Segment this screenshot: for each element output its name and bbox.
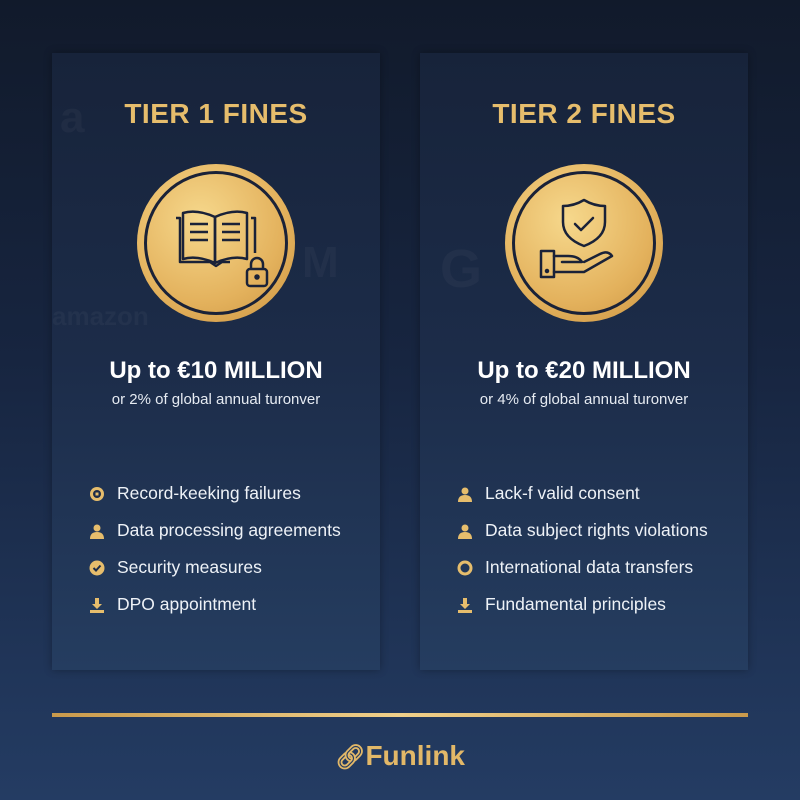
tier 2 list: Fundamental principles [485, 594, 666, 614]
tier 1 list: Security measures [117, 557, 262, 577]
tier 2 subtext: or 4% of global annual turonver [480, 391, 688, 408]
gold divider [52, 713, 748, 717]
tier 2 list: International data transfers [485, 557, 693, 577]
tier 1 title: TIER 1 FINES [124, 98, 308, 129]
tier 1 list: Record-keeking failures [117, 483, 301, 503]
tier 2 list [458, 483, 708, 614]
tier 1 subtext: or 2% of global annual turonver [112, 391, 320, 408]
tier 1 list: Data processing agreements [117, 520, 341, 540]
logo: Funlink: 🔗︎Funlink [335, 740, 465, 771]
panel: tier 2 [420, 53, 748, 670]
icon: book with lock [137, 164, 295, 322]
panel: tier 1: amazon [52, 301, 149, 331]
panel: tier 1: a [60, 93, 84, 142]
panel: tier 1: M [302, 238, 339, 287]
panel: tier 2: G [440, 239, 482, 299]
panel: tier 1 [52, 53, 380, 670]
tier 2 amount: Up to €20 MILLION [477, 357, 691, 384]
tier 2 list: Lack-f valid consent [485, 483, 640, 503]
icon: shield on hand [505, 164, 663, 322]
tier 1 list: DPO appointment [117, 594, 256, 614]
tier 2 list: Data subject rights violations [485, 520, 708, 540]
tier 2 title: TIER 2 FINES [492, 98, 676, 129]
tier 1 amount: Up to €10 MILLION [109, 357, 323, 384]
tier 1 list [90, 483, 341, 614]
